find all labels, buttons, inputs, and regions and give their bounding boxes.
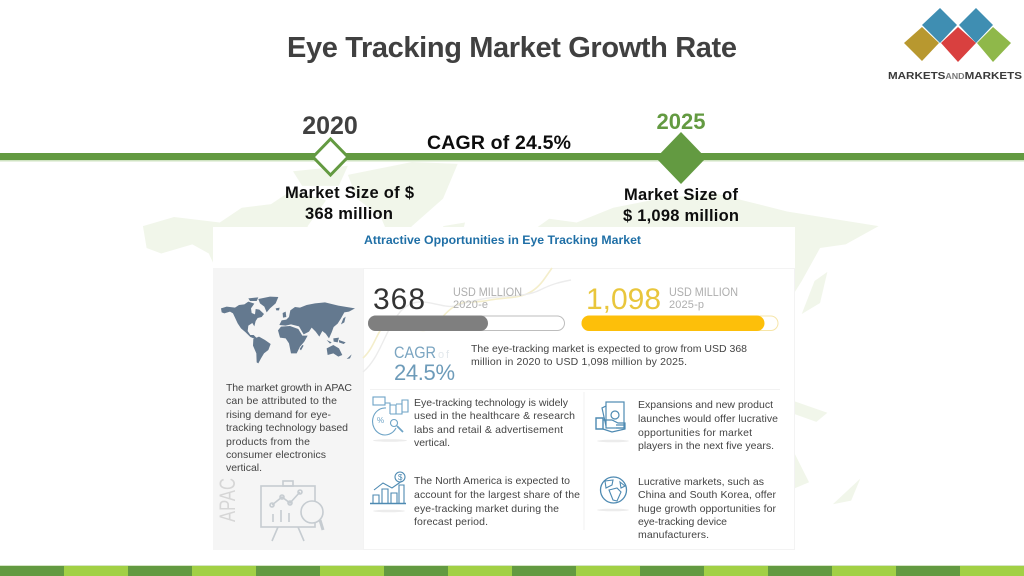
market growth description: million in 2020 to USD 1,098 million by 2025. bbox=[471, 356, 687, 368]
value: 368: 368 bbox=[373, 283, 425, 316]
title: Eye Tracking Market Growth Rate bbox=[287, 32, 737, 64]
text: Expansions and new product bbox=[638, 399, 773, 411]
text: opportunities for market bbox=[638, 427, 752, 439]
text: used in the healthcare & research bbox=[414, 410, 575, 422]
panel: APAC sidebar bbox=[213, 268, 363, 550]
APAC vertical label: APAC bbox=[215, 478, 240, 522]
panel: attractive opportunities infographic bbox=[213, 227, 795, 550]
APAC description: can be attributed to the bbox=[226, 395, 337, 407]
item: North America bbox=[370, 472, 580, 528]
CAGR label: CAGR of 24.5% bbox=[427, 132, 571, 154]
marker: 2025: 2025 bbox=[657, 109, 705, 134]
text bbox=[414, 397, 575, 449]
text: account for the largest share of the bbox=[414, 489, 580, 501]
text bbox=[638, 399, 778, 452]
marker: 2020 bbox=[302, 112, 358, 175]
value: 1,098: 2025-p bbox=[669, 299, 704, 311]
APAC description bbox=[226, 382, 352, 474]
CAGR callout: 24.5% bbox=[394, 360, 455, 385]
market size 2020 bbox=[285, 184, 414, 223]
text: players in the next five years. bbox=[638, 440, 774, 452]
icon: globe bbox=[597, 477, 629, 511]
market size 2020: Market Size of $ bbox=[285, 184, 414, 202]
CAGR callout: CAGR bbox=[394, 343, 436, 362]
text: huge growth opportunities for bbox=[638, 503, 776, 515]
text: Lucrative markets, such as bbox=[638, 476, 764, 488]
CAGR callout bbox=[394, 343, 455, 385]
APAC description: The market growth in APAC bbox=[226, 382, 352, 394]
APAC description: vertical. bbox=[226, 462, 262, 474]
text: China and South Korea, offer bbox=[638, 489, 776, 501]
text bbox=[638, 476, 776, 541]
value: 368: USD MILLION bbox=[453, 285, 522, 299]
market size 2025: Market Size of bbox=[624, 186, 738, 204]
item: expansions and launches bbox=[596, 399, 778, 452]
market growth description: The eye-tracking market is expected to grow from USD 368 bbox=[471, 343, 747, 355]
text: manufacturers. bbox=[638, 529, 709, 541]
panel heading: Attractive Opportunities in Eye Tracking Market bbox=[364, 235, 641, 247]
value: 1,098: 1,098 bbox=[586, 283, 661, 316]
text bbox=[414, 475, 580, 528]
APAC description: consumer electronics bbox=[226, 449, 326, 461]
icon: rising bars with dollar coin bbox=[370, 472, 406, 512]
dividers bbox=[370, 390, 780, 530]
item: healthcare vertical bbox=[373, 397, 575, 449]
logo: MarketsandMarkets bbox=[888, 8, 1022, 82]
value: 1,098: USD MILLION bbox=[669, 285, 738, 299]
background world map bbox=[143, 162, 879, 528]
icon: analytics: % bbox=[377, 416, 384, 425]
logo: MarketsandMarkets: MARKETS ANDMARKETS bbox=[888, 70, 1022, 82]
text: eye-tracking market during the bbox=[414, 503, 559, 515]
text: vertical. bbox=[414, 437, 450, 449]
icon: rising bars with dollar coin: $ bbox=[398, 473, 403, 482]
value: 368 bbox=[373, 283, 522, 316]
APAC description: products from the bbox=[226, 436, 310, 448]
text: The North America is expected to bbox=[414, 475, 570, 487]
bar: 2020 bbox=[368, 316, 564, 331]
footer stripe bbox=[0, 565, 1024, 576]
text: forecast period. bbox=[414, 516, 488, 528]
icon: analytics bbox=[373, 397, 408, 442]
value: 1,098 bbox=[586, 283, 738, 316]
text: eye-tracking device bbox=[638, 516, 727, 528]
marker: 2025 bbox=[656, 109, 706, 184]
panel: market figures bbox=[363, 268, 794, 550]
text: labs and retail & advertisement bbox=[414, 424, 563, 436]
timeline bar bbox=[0, 153, 1024, 162]
market growth description bbox=[471, 343, 747, 368]
APAC description: tracking technology based bbox=[226, 422, 348, 434]
icon: presentation board with magnifier bbox=[261, 481, 323, 541]
text: launches would offer lucrative bbox=[638, 413, 778, 425]
CAGR callout: of bbox=[438, 349, 450, 361]
item: lucrative markets bbox=[597, 476, 776, 541]
market size 2025 bbox=[623, 186, 739, 225]
marker: 2020: 2020 bbox=[302, 112, 358, 140]
icon: hand with banknotes bbox=[596, 402, 629, 442]
bar: 2025 bbox=[582, 316, 778, 331]
world map bbox=[221, 297, 355, 363]
APAC description: rising demand for eye- bbox=[226, 409, 332, 421]
decorative curves bbox=[363, 268, 552, 358]
text: Eye-tracking technology is widely bbox=[414, 397, 569, 409]
value: 368: 2020-e bbox=[453, 299, 488, 311]
market size 2025: $ 1,098 million bbox=[623, 207, 739, 225]
market size 2020: 368 million bbox=[305, 205, 393, 223]
